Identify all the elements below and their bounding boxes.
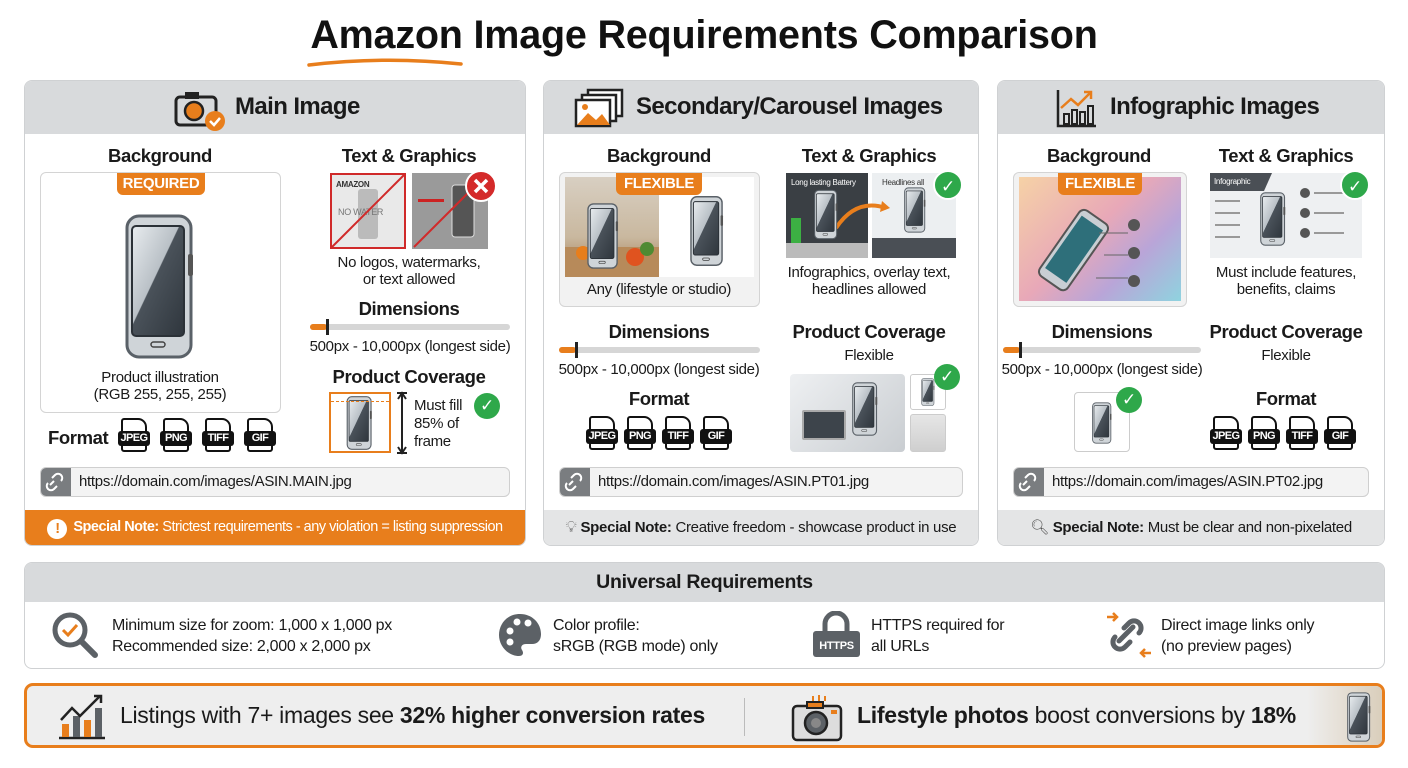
- caption: infographics allowed: [788, 264, 950, 298]
- format icons (secondary): PNG: [629, 430, 651, 442]
- text: flexible (infographic): Flexible: [1261, 347, 1311, 364]
- item: color profile: [499, 614, 718, 656]
- format icons (infographic): JPEG: [1213, 430, 1239, 442]
- dimensions slider (main): [310, 324, 510, 330]
- icon: green check: [933, 170, 963, 200]
- header title: Secondary/Carousel Images: [636, 93, 942, 120]
- format row (main): PNG: [165, 432, 187, 444]
- coverage diagram: [329, 391, 500, 455]
- badge: flexible: [616, 173, 702, 195]
- caption: Product illustration: [101, 369, 219, 386]
- caption: infographics allowed: Infographics, overlay text,: [788, 264, 950, 281]
- stats banner: [24, 683, 1385, 748]
- coverage examples (secondary): ✓: [940, 367, 954, 387]
- coverage example (infographic): [1074, 387, 1142, 452]
- heading: text & graphics (main): Text & Graphics: [342, 145, 476, 166]
- allowed overlay examples: Long lasting Battery: [791, 178, 856, 187]
- panel: main image: [24, 80, 526, 546]
- coverage example (infographic): ✓: [1122, 390, 1136, 410]
- coverage diagram: frame: [414, 433, 451, 450]
- heading: universal requirements: Universal Requirements: [596, 571, 813, 593]
- icon: red x: [465, 172, 495, 202]
- special note: main: Special Note: Strictest requirements - any violation = listing suppression: [73, 519, 503, 535]
- coverage diagram: ✓: [480, 396, 494, 416]
- dimensions slider (infographic): [1003, 347, 1201, 353]
- stat: 32%: Listings with 7+ images see 32% higher conversion rates: [120, 702, 705, 728]
- item: https: [813, 611, 1004, 657]
- white background box: [40, 172, 281, 413]
- url bar (main): [40, 467, 510, 497]
- heading: product coverage (main): Product Coverage: [333, 366, 485, 387]
- format icons (infographic): GIF: [1332, 430, 1348, 442]
- special note: main: !: [55, 521, 60, 537]
- caption: [94, 369, 226, 403]
- lifestyle photo thumbnail: [1307, 686, 1387, 748]
- caption: Any (lifestyle or studio): [587, 281, 731, 298]
- heading: background (main): Background: [108, 145, 212, 166]
- item: color profile: Color profile:: [553, 617, 640, 634]
- dimensions text (secondary): 500px - 10,000px (longest side): [559, 361, 759, 378]
- icon: stacked images: [574, 88, 624, 128]
- badge: flexible: FLEXIBLE: [1065, 175, 1135, 192]
- caption: must include features: [1216, 264, 1356, 298]
- format icons (secondary): GIF: [708, 430, 724, 442]
- icon: chart growth: [1056, 90, 1096, 128]
- light note bar: [998, 510, 1384, 545]
- item: color profile: sRGB (RGB mode) only: [553, 638, 718, 655]
- icon: camera with check: [174, 92, 225, 131]
- icon: green check: ✓: [941, 177, 955, 197]
- format row (main): [48, 418, 276, 452]
- url bar (main): https://domain.com/images/ASIN.MAIN.jpg: [79, 473, 352, 490]
- caption: no logos: or text allowed: [363, 271, 455, 288]
- title: Amazon Image Requirements Comparison: [310, 13, 1098, 57]
- caption: (RGB 255, 255, 255): [94, 386, 226, 403]
- coverage diagram: Must fill: [414, 397, 462, 414]
- heading: format (secondary): Format: [629, 388, 689, 409]
- infographic example: [1210, 172, 1368, 258]
- badge: flexible: [1058, 173, 1142, 195]
- header title: Main Image: [235, 93, 360, 120]
- heading: background (infographic): Background: [1047, 145, 1151, 166]
- coverage examples (secondary): [790, 364, 960, 452]
- url bar (secondary): [559, 467, 963, 497]
- infographic example: ✓: [1348, 177, 1362, 197]
- item: direct links: (no preview pages): [1161, 638, 1292, 655]
- heading: text & graphics (infographic): Text & Graphics: [1219, 145, 1353, 166]
- caption: must include features: benefits, claims: [1237, 281, 1335, 298]
- heading: product coverage (secondary): Product Coverage: [793, 321, 945, 342]
- allowed overlay examples: Headlines all: [882, 178, 924, 187]
- item: https: all URLs: [871, 638, 929, 655]
- allowed overlay examples: [786, 172, 961, 258]
- format icons (infographic): TIFF: [1292, 430, 1312, 442]
- prohibited examples: AMAZON: [336, 180, 370, 189]
- format icons (infographic): PNG: [1253, 430, 1275, 442]
- badge: flexible: FLEXIBLE: [624, 175, 694, 192]
- panel header: infographic: [998, 81, 1384, 134]
- item: https: HTTPS: [819, 640, 854, 652]
- format icons (secondary): TIFF: [668, 430, 688, 442]
- special note: main: [25, 510, 525, 545]
- item: size: Minimum size for zoom: 1,000 x 1,000 px: [112, 617, 392, 634]
- badge: required: [117, 173, 205, 195]
- badge: required: REQUIRED: [123, 175, 199, 192]
- heading: universal requirements: [25, 563, 1384, 602]
- dimensions text (main): 500px - 10,000px (longest side): [310, 338, 510, 355]
- prohibited examples: NO WATER: [338, 207, 384, 217]
- format row (main): JPEG: [121, 432, 147, 444]
- light note bar: [544, 510, 978, 545]
- gradient infographic box: [1013, 172, 1187, 307]
- format row (main): GIF: [252, 432, 268, 444]
- caption: no logos: [338, 254, 480, 288]
- text: flexible (secondary): Flexible: [844, 347, 894, 364]
- format icons (secondary): [586, 416, 732, 450]
- heading: format (infographic): Format: [1256, 388, 1316, 409]
- icon: camera: [792, 695, 842, 742]
- heading: product coverage (infographic): Product Coverage: [1210, 321, 1362, 342]
- item: direct links: [1107, 612, 1314, 658]
- title underline swoosh: [307, 58, 463, 67]
- infographic example: Infographic: [1214, 177, 1251, 186]
- lifestyle/studio box: [559, 172, 760, 307]
- header title: Infographic Images: [1110, 93, 1319, 120]
- heading: dimensions (main): Dimensions: [359, 298, 459, 319]
- format row (main): TIFF: [208, 432, 228, 444]
- format row (main): Format: [48, 427, 108, 448]
- divider: [744, 698, 745, 736]
- url bar (infographic): [1013, 467, 1369, 497]
- heading: dimensions (secondary): Dimensions: [609, 321, 709, 342]
- format icons (infographic): [1210, 416, 1356, 450]
- url bar (secondary): https://domain.com/images/ASIN.PT01.jpg: [598, 473, 869, 490]
- prohibited examples: [330, 172, 495, 249]
- caption: no logos: No logos, watermarks,: [338, 254, 480, 271]
- caption: infographics allowed: headlines allowed: [812, 281, 926, 298]
- dimensions slider (secondary): [559, 347, 760, 353]
- item: direct links: Direct image links only: [1161, 617, 1314, 634]
- panel header: main image: [25, 81, 525, 134]
- light note bar: 🔍︎ Special Note: Must be clear and non-pixelated: [1030, 519, 1352, 536]
- dimensions text (infographic): 500px - 10,000px (longest side): [1002, 361, 1202, 378]
- icon: rising chart: [59, 694, 105, 740]
- coverage diagram: 85% of: [414, 415, 459, 432]
- caption: must include features: Must include features,: [1216, 264, 1356, 281]
- heading: background (secondary): Background: [607, 145, 711, 166]
- panel: secondary/carousel: [543, 80, 979, 546]
- heading: dimensions (infographic): Dimensions: [1052, 321, 1152, 342]
- url bar (infographic): https://domain.com/images/ASIN.PT02.jpg: [1052, 473, 1323, 490]
- panel: universal requirements: [24, 562, 1385, 669]
- item: https: HTTPS required for: [871, 617, 1004, 634]
- stat: 18%: Lifestyle photos boost conversions by 18%: [857, 702, 1296, 728]
- item: size: [52, 612, 392, 658]
- light note bar: 💡︎ Special Note: Creative freedom - showcase product in use: [566, 519, 956, 536]
- phone illustration: [126, 214, 193, 358]
- panel header: secondary: [544, 81, 978, 134]
- item: size: Recommended size: 2,000 x 2,000 px: [112, 638, 370, 655]
- heading: text & graphics (secondary): Text & Graphics: [802, 145, 936, 166]
- format icons (secondary): JPEG: [589, 430, 615, 442]
- panel: infographic: [997, 80, 1385, 546]
